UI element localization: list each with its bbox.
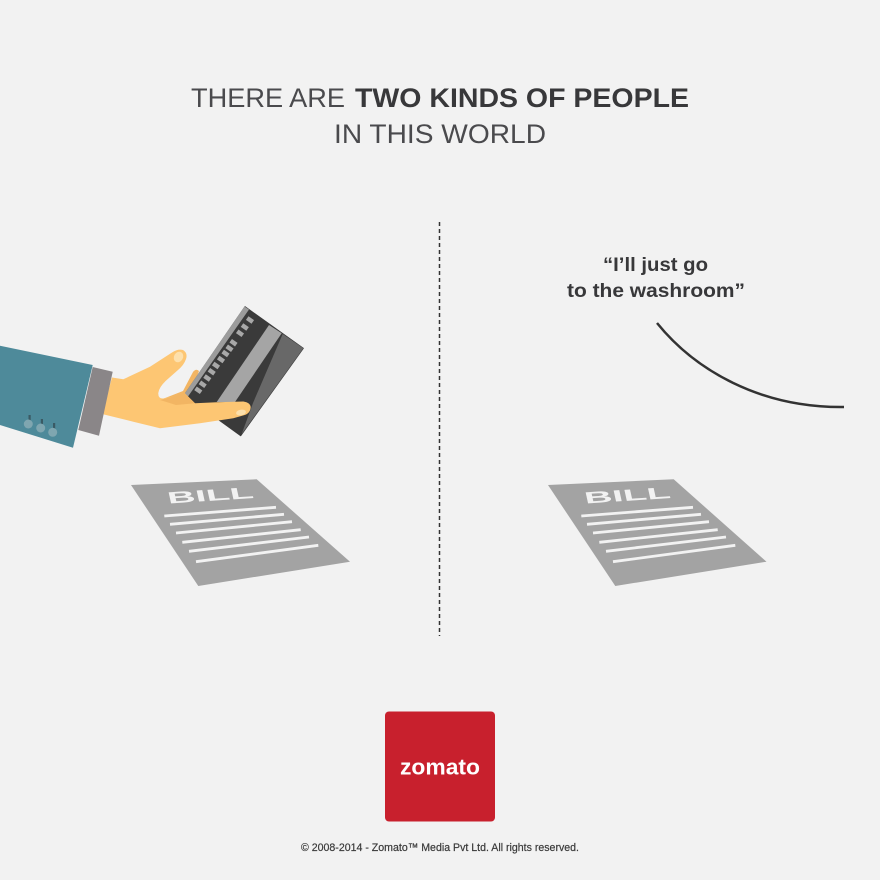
credit card [184,306,303,436]
title: IN THIS WORLD [334,119,546,149]
bill text lines [164,507,318,562]
card number dashes [194,316,254,394]
zomato logo [385,712,495,822]
centre dashed divider [438,222,440,636]
shirt cuff [78,367,113,436]
palm shadow [160,392,195,405]
motion curve [657,323,844,407]
suit sleeve [0,346,93,448]
bill text lines [581,507,735,562]
title: TWO KINDS OF PEOPLE [355,83,689,113]
speech quote: to the washroom” [567,281,745,302]
bill left [131,479,350,586]
bill right [548,479,766,586]
speech quote [567,255,745,302]
icon: far finger behind card [160,370,199,405]
bill label: BILL [582,484,673,507]
icon: hand holding credit card [0,306,303,448]
speech quote: “I’ll just go [603,255,708,276]
copyright footer: © 2008-2014 - Zomato™ Media Pvt Ltd. All rights reserved. [301,842,579,854]
title [191,83,689,149]
fingernails [172,350,185,364]
sleeve buttons [24,415,57,437]
zomato logo: zomato [400,754,480,780]
hand [102,350,251,428]
title: THERE ARE [191,83,345,113]
bill label: BILL [165,484,256,507]
